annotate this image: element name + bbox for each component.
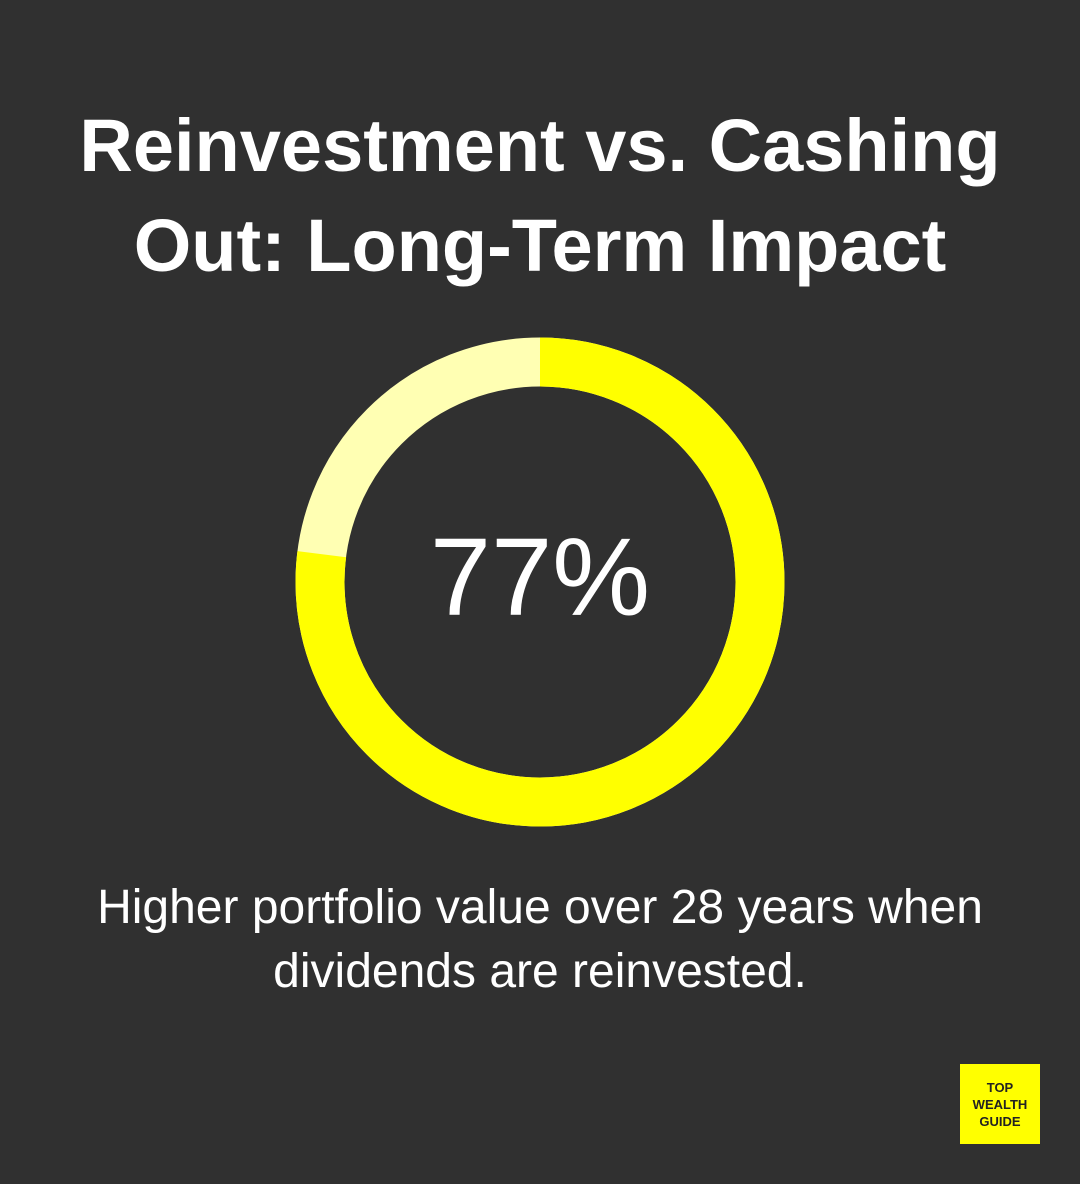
title: Reinvestment vs. Cashing bbox=[79, 104, 1001, 187]
logo: WEALTH bbox=[973, 1096, 1027, 1112]
title bbox=[79, 104, 1001, 287]
ring value segment 77% bbox=[320, 362, 760, 802]
description: Higher portfolio value over 28 years when bbox=[97, 881, 983, 934]
ring background segment bbox=[320, 362, 760, 802]
title: Out: Long-Term Impact bbox=[134, 204, 946, 287]
logo: TOP bbox=[987, 1080, 1013, 1094]
logo bbox=[960, 1064, 1040, 1144]
description bbox=[97, 881, 983, 998]
percentage: 77% bbox=[430, 516, 650, 639]
description: dividends are reinvested. bbox=[273, 945, 807, 998]
logo: GUIDE bbox=[979, 1114, 1021, 1128]
